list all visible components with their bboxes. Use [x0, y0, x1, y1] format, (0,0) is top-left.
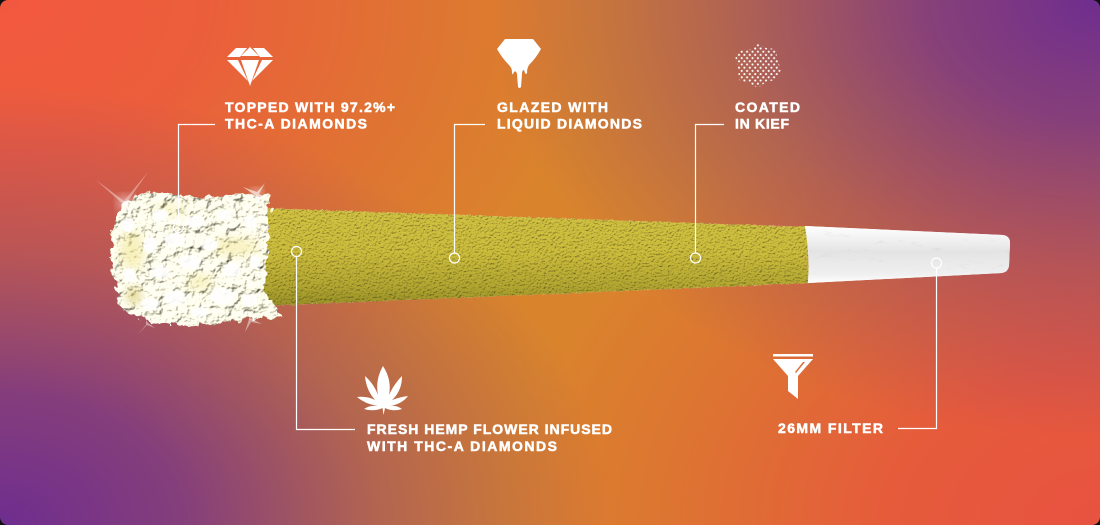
callout line: hemp flower	[292, 246, 355, 430]
callout line: filter	[898, 258, 942, 428]
sparkles	[96, 172, 270, 334]
icon: hemp leaf	[357, 366, 408, 415]
text: coated in kief: IN KIEF	[735, 116, 789, 132]
cone	[96, 172, 1010, 334]
text: coated in kief: COATED	[735, 99, 800, 115]
crystal top: THC-A diamonds	[112, 192, 283, 326]
callout line: topped	[174, 124, 215, 232]
icon: diamond	[227, 47, 273, 86]
text: topped with diamonds: THC-A DIAMONDS	[225, 116, 367, 132]
callout line: glazed	[450, 124, 485, 263]
text: hemp flower: FRESH HEMP FLOWER INFUSED	[367, 421, 612, 437]
cone filter tip	[805, 226, 1010, 283]
text: hemp flower: WITH THC-A DIAMONDS	[367, 438, 557, 454]
crystal chunks	[121, 209, 260, 317]
text: glazed: LIQUID DIAMONDS	[497, 116, 642, 132]
text: glazed: GLAZED WITH	[497, 99, 608, 115]
cone body: kief-coated paper	[258, 208, 809, 306]
icon: funnel	[773, 354, 813, 399]
icon: kief dots	[735, 43, 781, 88]
text: 26mm filter: 26MM FILTER	[778, 420, 883, 436]
icon: dripping diamond	[497, 39, 541, 88]
callout line: coated	[690, 124, 724, 263]
text: topped with diamonds: TOPPED WITH 97.2%+	[225, 99, 395, 115]
